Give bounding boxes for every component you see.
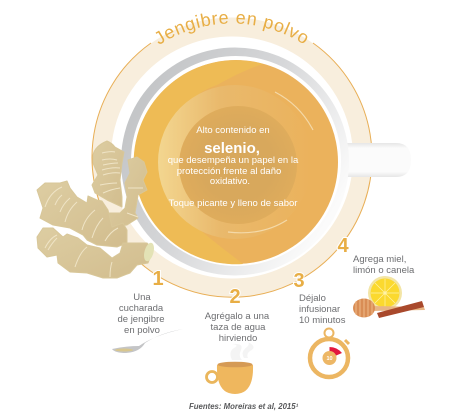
- ginger root: [37, 141, 156, 278]
- cup text: Toque picante y lleno de sabor: [169, 198, 297, 209]
- step 1 text: de jengibre: [117, 314, 165, 325]
- step 2 text: hirviendo: [219, 333, 257, 344]
- step 2 text: taza de agua: [211, 322, 266, 333]
- outer ring: [92, 27, 372, 297]
- step 3 text: 10 minutos: [299, 315, 346, 326]
- step 1 text: en polvo: [124, 325, 160, 336]
- icon: tea cup: [206, 342, 254, 394]
- step 2 text: Agrégalo a una: [205, 311, 270, 322]
- step 1 text: cucharada: [119, 303, 164, 314]
- icon: spoon: [112, 329, 183, 353]
- cup text: protección frente al daño: [177, 166, 281, 177]
- step 1 text: Una: [133, 292, 151, 303]
- title: Jengibre en polvo: [156, 14, 308, 44]
- step 4 text: [353, 254, 415, 276]
- cup text: Alto contenido en: [196, 125, 270, 136]
- icon: lemon, honey dipper and cinnamon: [353, 276, 425, 318]
- source note: Fuentes: Moreiras et al, 2015¹: [189, 402, 299, 411]
- step 3 text: Déjalo: [299, 293, 326, 304]
- step 3 text: [299, 293, 346, 326]
- icon: timer: 10: [326, 356, 333, 362]
- cup text: oxidativo.: [210, 176, 250, 187]
- step numbers: [152, 235, 349, 308]
- ginger ridges: [45, 152, 143, 277]
- step 4 text: limón o canela: [353, 265, 415, 276]
- cup handle: [340, 143, 411, 177]
- step numbers: 1: [152, 268, 164, 290]
- cup text: [168, 125, 299, 209]
- cup text: selenio,: [204, 140, 260, 157]
- step 3 text: infusionar: [299, 304, 340, 315]
- step 4 text: Agrega miel,: [353, 254, 406, 265]
- step 1 text: [117, 292, 165, 336]
- icon: timer: [310, 328, 349, 377]
- step numbers: 2: [229, 286, 241, 308]
- cup text: que desempeña un papel en la: [168, 155, 299, 166]
- step numbers: 4: [337, 235, 349, 257]
- step 2 text: [205, 311, 270, 344]
- step numbers: 3: [293, 270, 305, 292]
- cup: [121, 48, 349, 276]
